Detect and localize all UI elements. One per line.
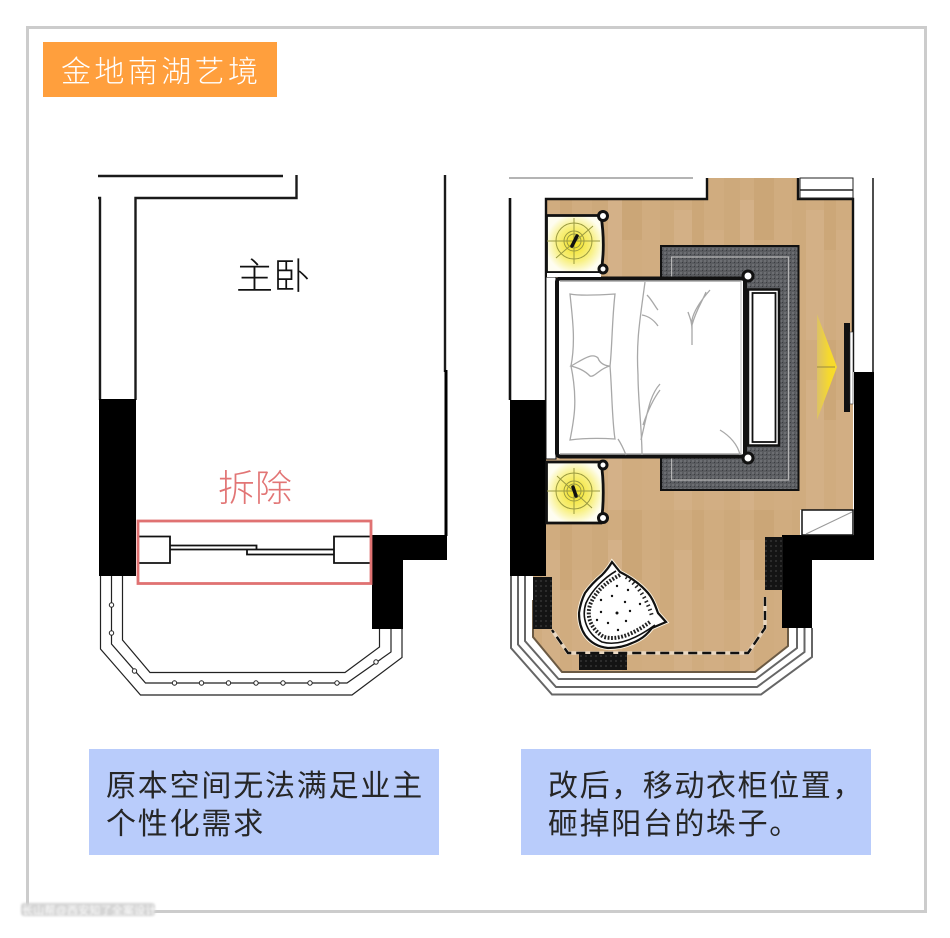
curtain bundles xyxy=(533,537,783,670)
caption: renovated: 砸掉阳台的垛子。 xyxy=(548,808,801,841)
balcony railing lines xyxy=(100,576,402,695)
caption: original xyxy=(89,749,439,855)
room label: master bedroom: 主卧 xyxy=(236,256,310,297)
bed footboard bench xyxy=(748,290,779,446)
nightstand bottom xyxy=(546,461,608,523)
watermark: 长山帮@西安知了全案设计 xyxy=(22,903,157,917)
balcony lines xyxy=(511,576,812,694)
caption: original: 个性化需求 xyxy=(106,808,265,841)
title badge: 金地南湖艺境 xyxy=(61,56,261,89)
sliding door xyxy=(138,536,370,563)
walls: original plan xyxy=(98,175,447,629)
demolition label: 拆除 xyxy=(218,468,292,509)
closet stubs xyxy=(800,178,853,535)
demolition highlight box xyxy=(138,521,371,584)
title badge xyxy=(43,42,277,97)
caption: renovated xyxy=(521,749,871,855)
walls: renovated plan xyxy=(509,178,874,628)
curtain track dashed xyxy=(552,597,765,653)
original floor plan xyxy=(98,175,447,695)
yellow wardrobe light xyxy=(817,314,837,420)
rug xyxy=(661,246,798,490)
wood floor xyxy=(533,178,853,672)
renovated floor plan xyxy=(509,178,874,694)
wardrobe rail xyxy=(844,323,853,412)
caption: original: 原本空间无法满足业主 xyxy=(106,770,424,803)
nightstand top xyxy=(546,212,608,277)
caption: renovated: 改后，移动衣柜位置， xyxy=(548,770,864,803)
bed xyxy=(546,271,753,463)
armchair xyxy=(579,562,666,648)
bedding sketch lines xyxy=(570,282,740,455)
